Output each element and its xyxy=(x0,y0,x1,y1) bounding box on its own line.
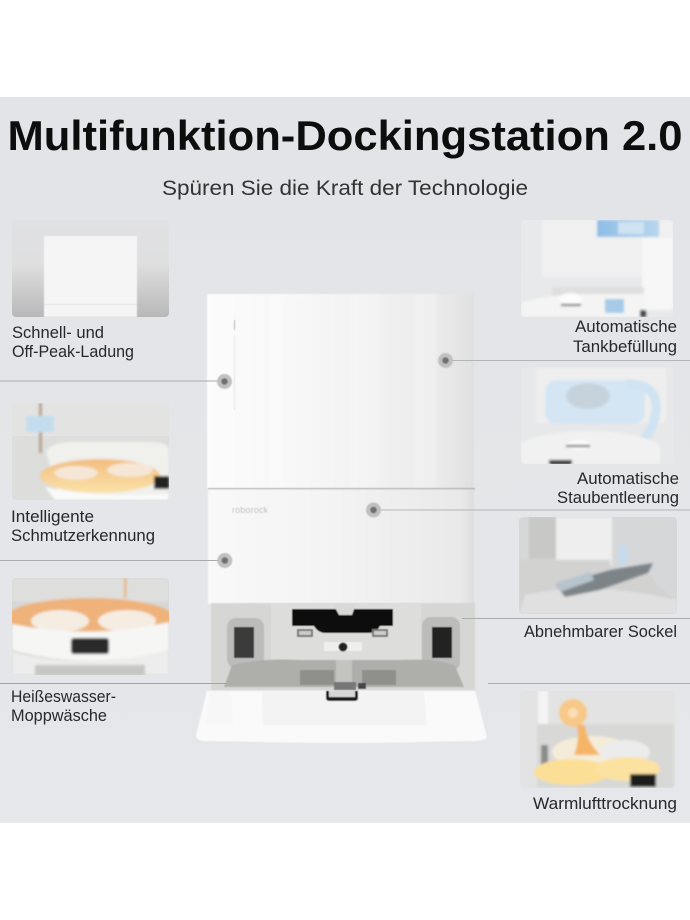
panel: Warmlufttrocknung xyxy=(520,691,677,813)
panel: Heißeswasser-Moppwäsche: Moppwäsche xyxy=(11,707,107,725)
panel: Automatische Tankbefüllung: Tankbefüllung xyxy=(573,338,677,356)
brand logo: roborock xyxy=(232,505,268,515)
station base tray xyxy=(196,691,487,743)
panel: Heißeswasser-Moppwäsche xyxy=(6,578,174,725)
panel: Automatische Staubentleerung: Staubentleerung xyxy=(557,489,679,507)
right cleaning port xyxy=(422,617,460,671)
callout: Warmlufttrocknung xyxy=(488,683,690,684)
station lower body xyxy=(208,488,475,604)
panel: Automatische Staubentleerung xyxy=(521,367,679,507)
photo: hot water mop wash xyxy=(6,578,174,675)
panel: Abnehmbarer Sockel xyxy=(519,517,677,641)
label: Schnell- und xyxy=(12,324,104,342)
label: Abnehmbarer Sockel xyxy=(524,623,677,641)
label: Automatische xyxy=(575,318,677,336)
station open cavity xyxy=(211,603,475,690)
callout: Intelligente Schmutzerkennung xyxy=(0,553,232,568)
callout: Automatische Tankbefüllung xyxy=(438,353,690,368)
station upper tank body xyxy=(207,294,474,488)
label: Heißeswasser- xyxy=(11,688,116,706)
label: Intelligente xyxy=(11,508,94,526)
label: Automatische xyxy=(577,470,679,488)
callout: Schnell- und Off-Peak-Ladung xyxy=(0,374,232,389)
photo: dust emptying xyxy=(521,367,673,464)
photo: removable base xyxy=(519,517,677,614)
photo: mop scan xyxy=(12,403,169,500)
photo: warm air drying xyxy=(520,691,675,788)
callout: Heißeswasser-Moppwäsche xyxy=(0,683,226,684)
photo: station front xyxy=(12,236,169,317)
callout lines and markers xyxy=(0,353,690,684)
title: Multifunktion-Dockingstation 2.0 xyxy=(8,112,682,159)
photo: water tank refill xyxy=(521,220,673,317)
subtitle: Spüren Sie die Kraft der Technologie xyxy=(162,177,528,200)
left cleaning port xyxy=(227,618,264,668)
product: docking station xyxy=(196,294,487,743)
callout: Abnehmbarer Sockel xyxy=(462,618,690,619)
infographic canvas xyxy=(0,97,690,823)
panel: Intelligente Schmutzerkennung: Schmutzerkennung xyxy=(11,527,155,545)
panel: Schnell- und Off-Peak-Ladung xyxy=(12,236,169,360)
label: Warmlufttrocknung xyxy=(533,795,677,813)
panel: Intelligente Schmutzerkennung xyxy=(11,403,169,545)
panel: Automatische Tankbefüllung xyxy=(521,220,677,356)
grey background panel xyxy=(0,97,690,823)
callout: Automatische Staubentleerung xyxy=(366,502,690,518)
panel: Schnell- und Off-Peak-Ladung: Off-Peak-Ladung xyxy=(12,343,134,361)
